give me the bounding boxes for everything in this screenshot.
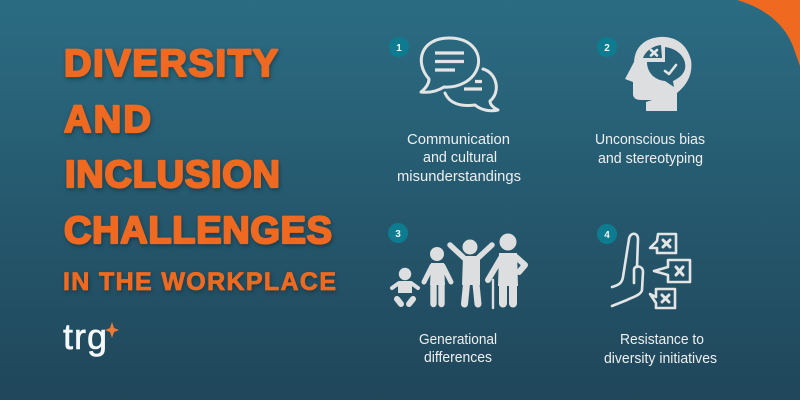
icon: speech bubbles xyxy=(421,38,498,111)
caption 4: diversity initiatives xyxy=(604,351,717,367)
caption 2: Unconscious bias xyxy=(595,132,705,148)
title: DIVERSITY xyxy=(64,43,278,85)
title: IN THE WORKPLACE xyxy=(63,268,336,296)
number badge 2: 2 xyxy=(604,43,610,54)
number badge 3 xyxy=(388,223,408,243)
icon: family of four generations xyxy=(392,234,525,308)
title: CHALLENGES xyxy=(64,210,332,252)
caption 1: Communication xyxy=(407,132,510,148)
caption 3: differences xyxy=(424,350,492,366)
caption 4: Resistance to xyxy=(620,332,704,348)
orange corner shape xyxy=(737,0,800,66)
icon: head with thought panels xyxy=(625,37,691,111)
grandparent with cane xyxy=(488,234,525,308)
caption 1: and cultural xyxy=(423,150,497,166)
adult with raised arms xyxy=(450,240,492,304)
caption 2: and stereotyping xyxy=(598,151,703,167)
number badge 4: 4 xyxy=(604,230,610,241)
item 1: communication xyxy=(389,37,521,185)
hand xyxy=(612,234,643,306)
item 2: unconscious bias xyxy=(595,37,705,167)
rejected message top xyxy=(650,234,676,253)
item 3: generational differences xyxy=(388,223,525,366)
caption 4 xyxy=(604,332,717,367)
item 4: resistance xyxy=(597,224,717,367)
title: INCLUSION xyxy=(65,154,280,196)
rejected message middle xyxy=(654,260,690,282)
caption 2 xyxy=(595,132,705,167)
child xyxy=(424,247,451,304)
number badge 3: 3 xyxy=(395,229,401,240)
baby xyxy=(392,268,418,304)
rejected message bottom xyxy=(650,289,675,308)
caption 3 xyxy=(419,332,497,366)
number badge 1 xyxy=(389,37,409,57)
title: AND xyxy=(64,99,151,141)
number badge 1: 1 xyxy=(396,43,402,54)
logo: trg: trg xyxy=(63,316,107,357)
caption 1 xyxy=(397,132,521,185)
number badge 4 xyxy=(597,224,617,244)
icon: raised hand with rejected messages xyxy=(612,234,690,308)
caption 1: misunderstandings xyxy=(397,169,521,185)
title xyxy=(63,43,336,296)
caption 3: Generational xyxy=(419,332,497,348)
